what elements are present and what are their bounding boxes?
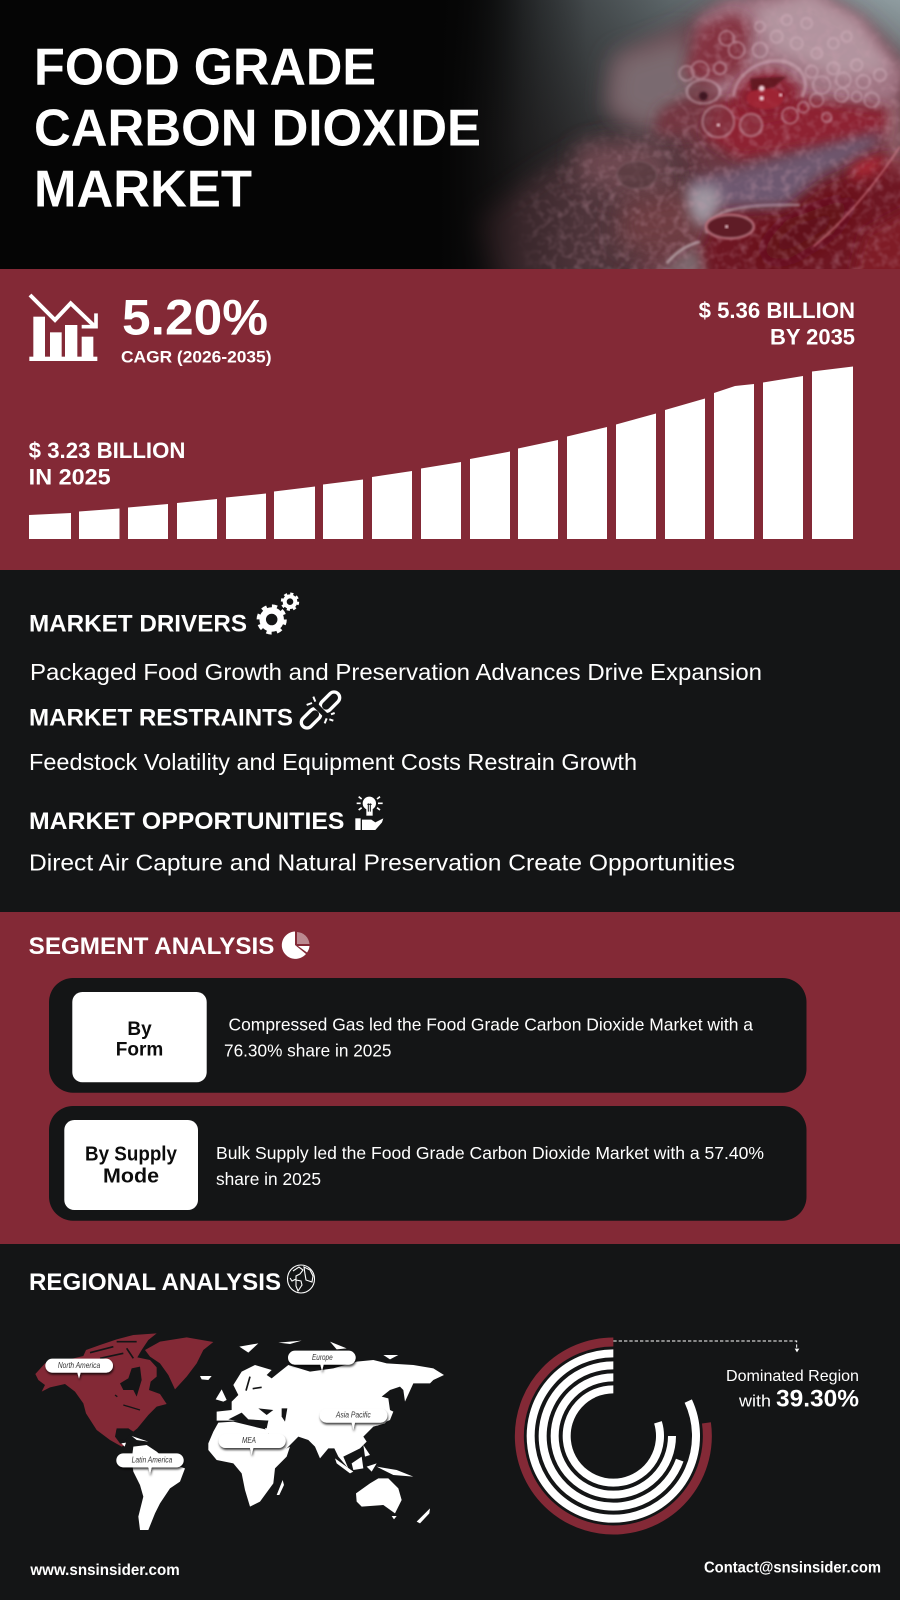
card: by form (49, 978, 806, 1093)
footer: contact: Contact@snsinsider.com (704, 1560, 881, 1577)
heading: market opportunities: MARKET OPPORTUNITIES (29, 808, 344, 835)
callout: MEA: MEA (242, 1436, 256, 1445)
panel: market size and CAGR (0, 269, 900, 570)
text: by supply mode (216, 1143, 764, 1189)
bubbles (679, 15, 886, 138)
Hudson Bay and Arctic gaps (90, 1342, 142, 1440)
callout: North America: North America (58, 1361, 101, 1370)
region: North America highlighted (35, 1333, 213, 1447)
radial bar chart (519, 1341, 799, 1530)
label box: by form: By (127, 1019, 152, 1040)
panel: segment analysis (0, 912, 900, 1244)
callout: dominated region: Dominated Region (726, 1368, 859, 1385)
text: by form: Compressed Gas led the Food Grade Carbon Dioxide Market with a (228, 1015, 753, 1035)
callout: dominated region: with (738, 1392, 771, 1411)
label box: by supply mode: By Supply (85, 1144, 178, 1166)
text: drivers: Packaged Food Growth and Preservation Advances Drive Expansion (30, 659, 762, 685)
label box: by form: Form (116, 1040, 163, 1061)
callout: MEA (219, 1434, 286, 1455)
title: CARBON DIOXIDE (34, 100, 481, 158)
2025 value: IN 2025 (29, 465, 111, 490)
2035 value: BY 2035 (770, 325, 855, 350)
card: by supply mode (49, 1106, 806, 1221)
footer: website: www.snsinsider.com (29, 1562, 180, 1579)
icon: chart with falling arrow (29, 295, 97, 361)
2035 value (699, 298, 855, 350)
callout: Europe (288, 1351, 356, 1371)
title: FOOD GRADE (34, 39, 376, 97)
title: MARKET (34, 160, 252, 218)
text: by supply mode: share in 2025 (216, 1169, 321, 1189)
heading: market drivers: MARKET DRIVERS (29, 611, 247, 638)
icon: gears (258, 594, 298, 633)
CAGR value: 5.20% (122, 290, 268, 346)
heading: regional analysis: REGIONAL ANALYSIS (29, 1269, 281, 1296)
land masses (121, 1341, 444, 1530)
heading: segment analysis: SEGMENT ANALYSIS (29, 933, 274, 960)
CAGR label: CAGR (2026-2035) (121, 348, 272, 366)
callout: North America (45, 1359, 113, 1379)
callout: Asia Pacific: Asia Pacific (335, 1411, 371, 1420)
callout: dominated region (726, 1368, 859, 1413)
icon: globe (288, 1265, 314, 1293)
world map (35, 1333, 444, 1530)
text: by form (224, 1015, 753, 1061)
header panel (0, 0, 900, 287)
heading: market restraints: MARKET RESTRAINTS (29, 705, 293, 732)
text: by supply mode: Bulk Supply led the Food Grade Carbon Dioxide Market with a 57.40% (216, 1143, 764, 1163)
inland seas (228, 1377, 287, 1428)
2035 value: $ 5.36 BILLION (699, 298, 855, 323)
2025 value (29, 438, 185, 490)
icon: pie chart (282, 932, 310, 959)
icon: idea hand (355, 797, 383, 830)
header photo: red liquid with bubbles (440, 0, 900, 287)
label box: by form (72, 992, 207, 1082)
callout: Europe: Europe (312, 1353, 333, 1362)
text: opportunities: Direct Air Capture and Natural Preservation Create Opportunities (29, 850, 735, 876)
callout: Latin America: Latin America (132, 1456, 173, 1465)
callout: Asia Pacific (320, 1409, 387, 1430)
text: by form: 76.30% share in 2025 (224, 1041, 392, 1061)
bubble highlights and pits (493, 77, 787, 239)
bar chart: market growth (29, 366, 853, 539)
label box: by supply mode: Mode (103, 1166, 159, 1188)
icon: broken chain (299, 690, 342, 730)
panel: regional analysis (0, 1244, 900, 1600)
panel: drivers, restraints, opportunities (0, 570, 900, 912)
dashed leader arrow (613, 1341, 799, 1352)
label box: by supply mode (64, 1120, 198, 1210)
title (34, 39, 481, 218)
callout: dominated region: 39.30% (776, 1386, 859, 1413)
text: restraints: Feedstock Volatility and Equipment Costs Restrain Growth (29, 749, 637, 775)
callout: Latin America (116, 1453, 184, 1474)
2025 value: $ 3.23 BILLION (29, 438, 185, 463)
